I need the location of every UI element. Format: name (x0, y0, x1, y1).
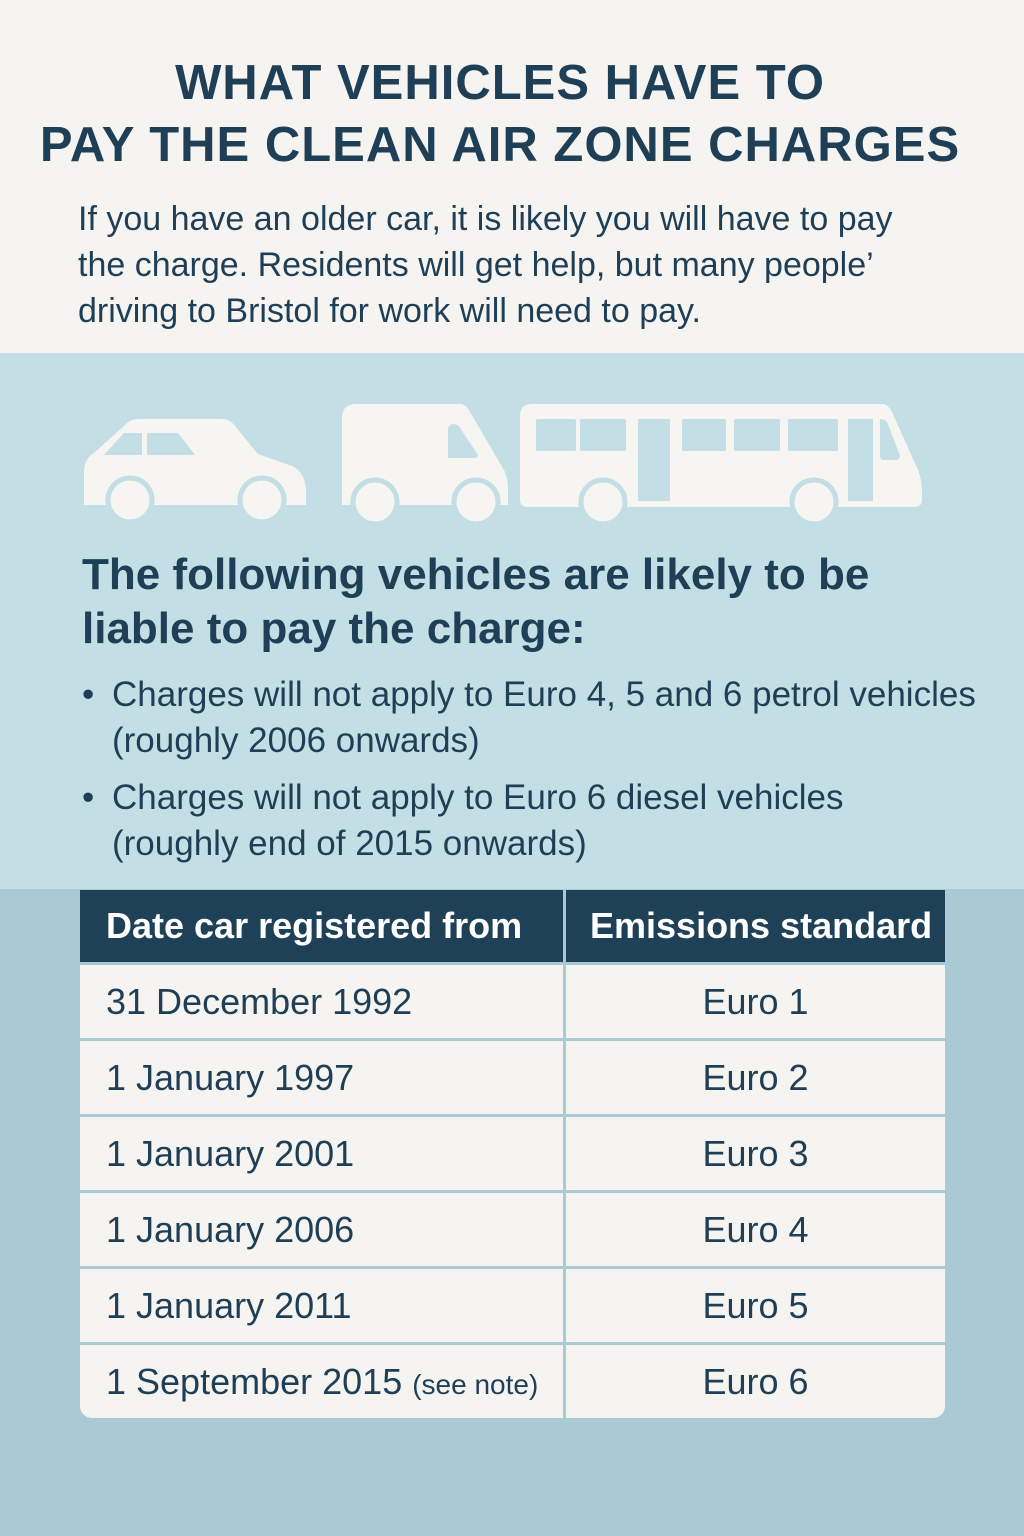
intro text: If you have an older car, it is likely you will have to pay (78, 200, 893, 238)
icon: car (84, 419, 306, 522)
table: emissions standards: 1 January 1997 (106, 1056, 354, 1098)
table: emissions standards: 1 January 2001 (106, 1132, 354, 1174)
bullet list (83, 675, 976, 863)
intro text (78, 200, 893, 330)
table: emissions standards: Euro 1 (702, 980, 809, 1022)
title: PAY THE CLEAN AIR ZONE CHARGES (40, 118, 960, 172)
table: emissions standards: Euro 2 (702, 1056, 809, 1098)
table: emissions standards: Euro 3 (702, 1132, 809, 1174)
icon: vehicles (84, 404, 922, 522)
bullet list: (roughly end of 2015 onwards) (112, 824, 587, 863)
table: emissions standards: Euro 5 (702, 1284, 809, 1326)
intro text: the charge. Residents will get help, but many people’ (78, 246, 874, 284)
title (40, 56, 960, 172)
table: emissions standards: 1 January 2011 (106, 1284, 352, 1326)
table: emissions standards: 1 September 2015 (see note) (106, 1360, 538, 1402)
bullet list: Charges will not apply to Euro 6 diesel vehicles (112, 778, 844, 817)
bullet list: (roughly 2006 onwards) (112, 721, 480, 760)
icon: van (342, 404, 508, 524)
table: emissions standards (80, 890, 945, 1418)
bullet list: Charges will not apply to Euro 4, 5 and 6 petrol vehicles (112, 675, 976, 714)
heading: liable vehicles (82, 550, 869, 653)
icon: bus (520, 404, 922, 524)
table: emissions standards: Date car registered from (106, 905, 522, 946)
table: emissions standards: 31 December 1992 (106, 980, 412, 1022)
table: emissions standards: Euro 4 (702, 1208, 809, 1250)
heading: liable vehicles: liable to pay the charge: (82, 604, 586, 653)
table: emissions standards: 1 January 2006 (106, 1208, 354, 1250)
table: emissions standards: Euro 6 (702, 1360, 809, 1402)
table: emissions standards: Emissions standard (590, 905, 932, 946)
heading: liable vehicles: The following vehicles are likely to be (82, 550, 869, 599)
intro text: driving to Bristol for work will need to pay. (78, 292, 701, 330)
title: WHAT VEHICLES HAVE TO (175, 56, 825, 110)
